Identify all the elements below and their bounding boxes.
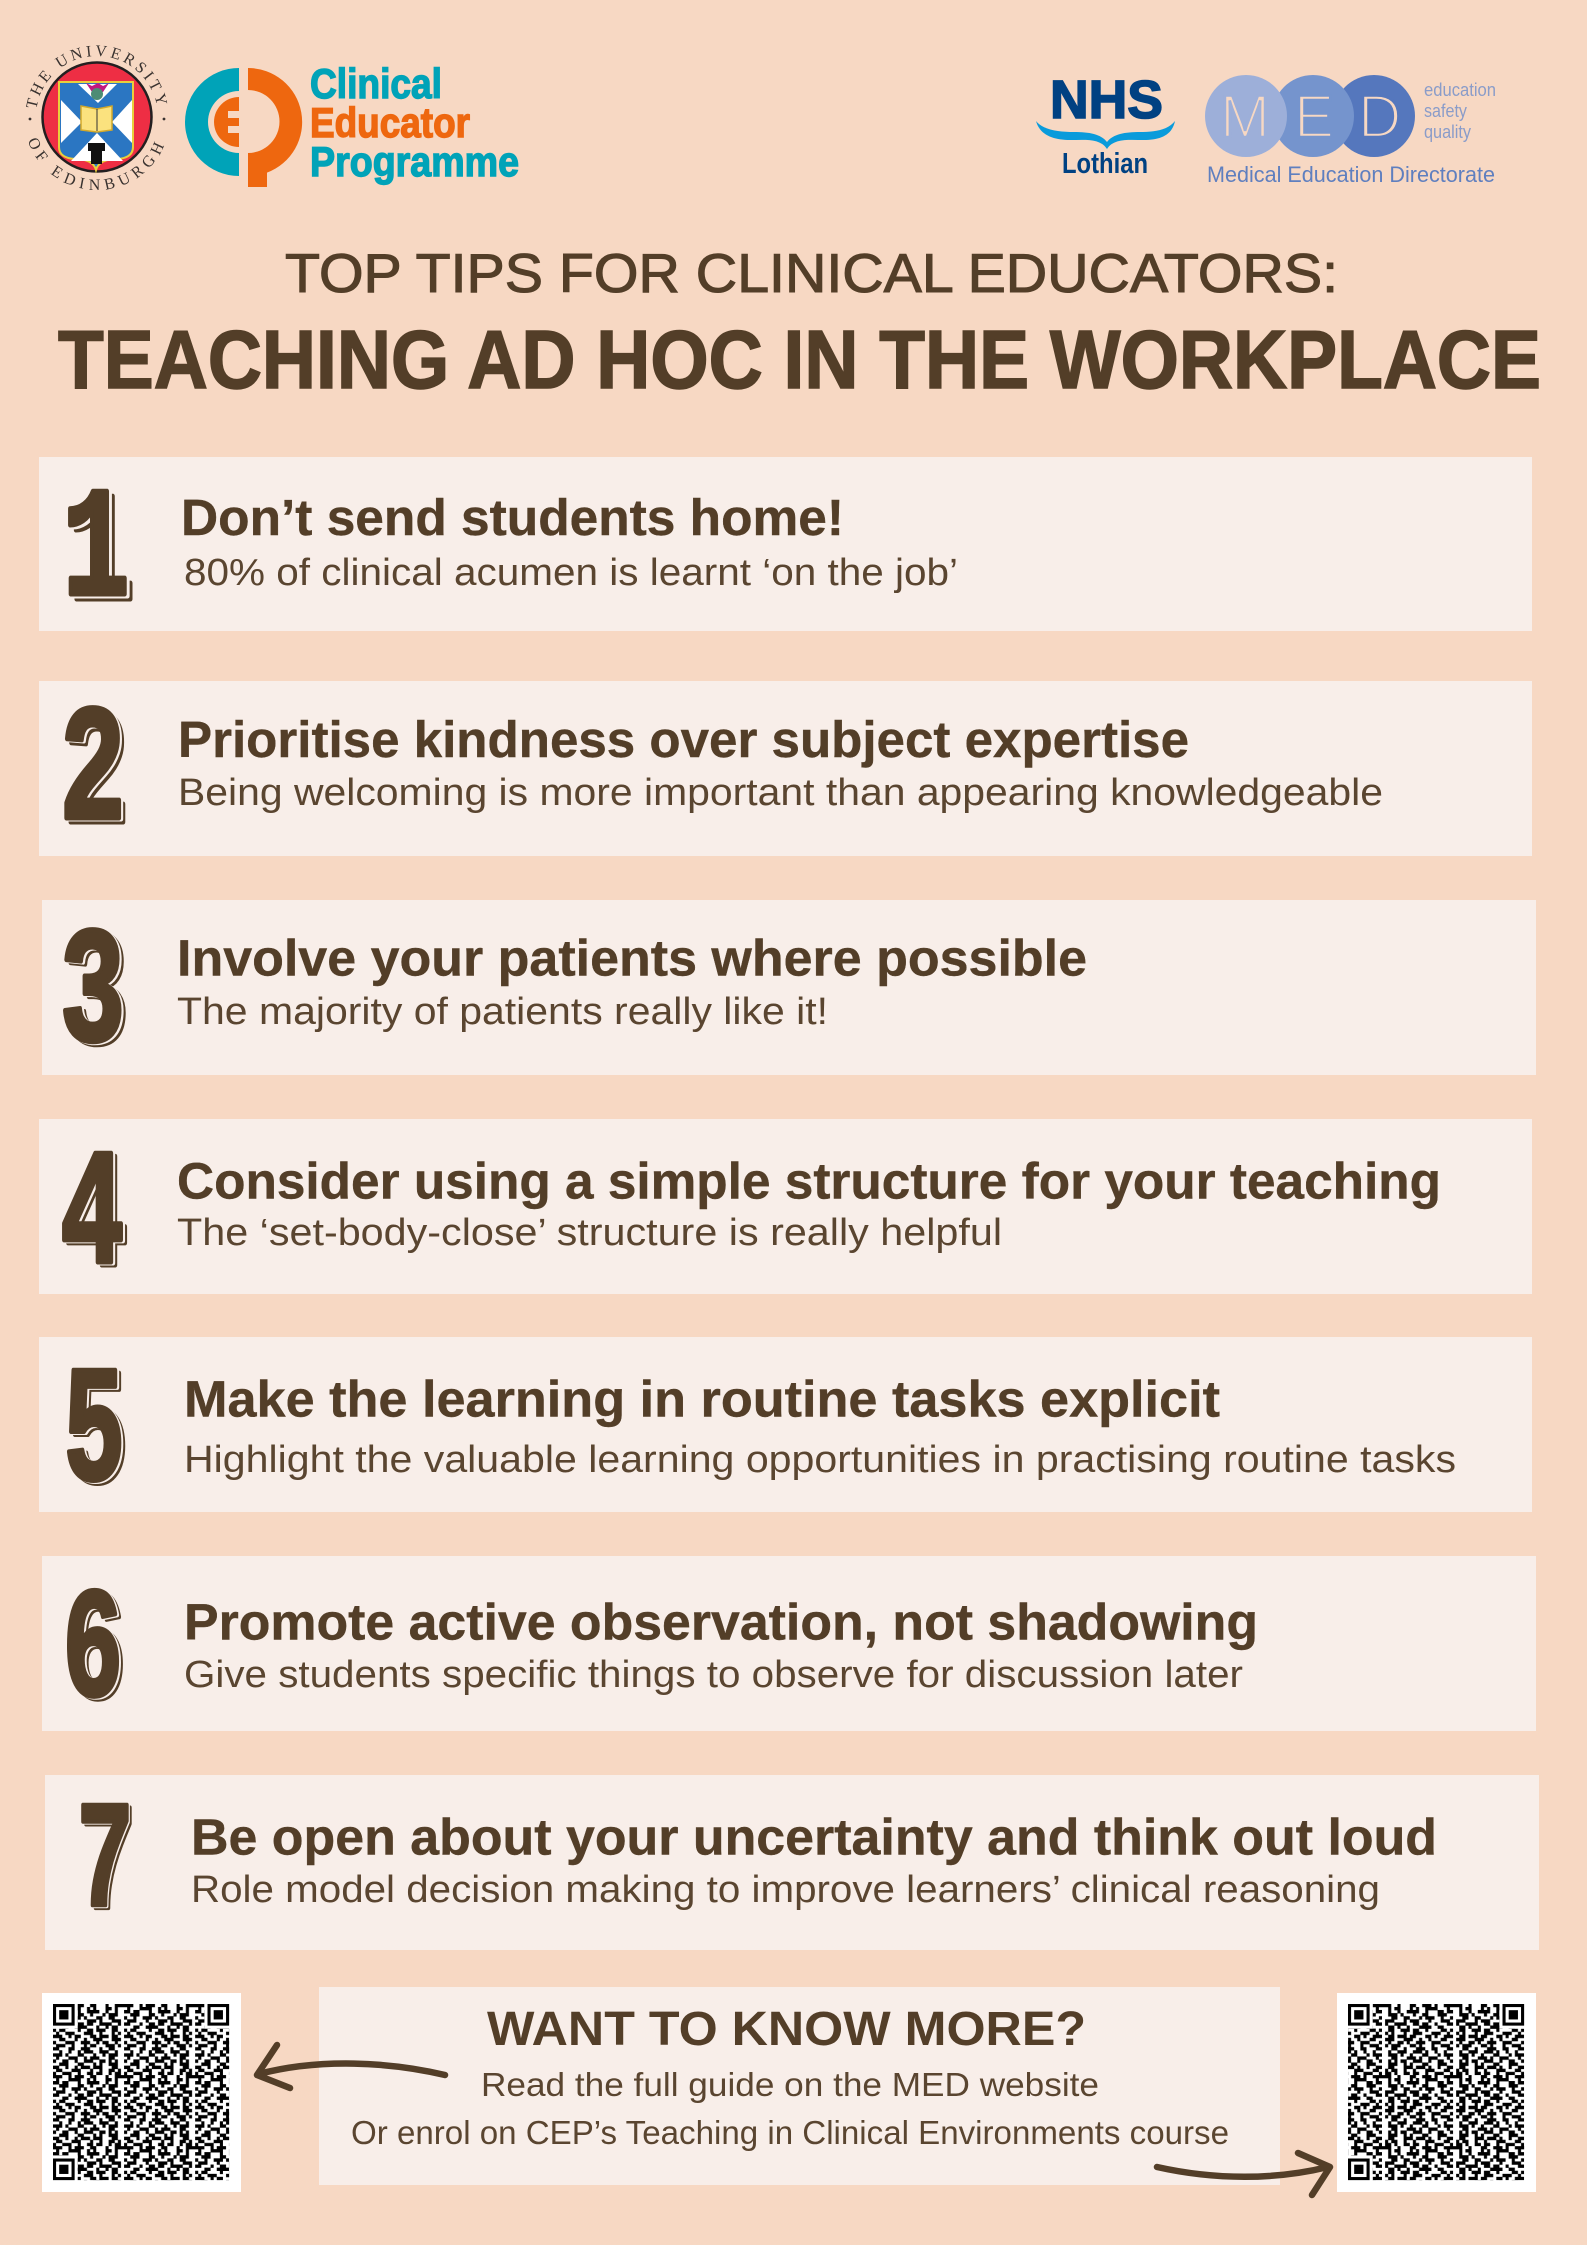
QR code: left: [42, 1993, 241, 2192]
number 4: 4: [62, 1119, 122, 1296]
panel: tip 6: [42, 1556, 1536, 1731]
logo: Clinical Educator Programme: [185, 60, 519, 187]
panel: tip 1: [39, 457, 1532, 646]
description: The ‘set-body-close’ structure is really helpful: [177, 1212, 1002, 1254]
panel: tip 5: [39, 1337, 1532, 1516]
line: full guide: Read the full guide on the MED website: [481, 2066, 1099, 2103]
description: The majority of patients really like it!: [177, 991, 828, 1033]
number 3: 3: [64, 898, 126, 1075]
heading: Prioritise kindness over subject expertise: [178, 711, 1189, 768]
logo: Medical Education Directorate: D: [1358, 83, 1401, 150]
heading: Be open about your uncertainty and think out loud: [191, 1808, 1437, 1866]
small E: [214, 97, 239, 147]
logo: University of Edinburgh crest: OF EDINBURGH: [29, 138, 164, 190]
logo: NHS Lothian: NHS: [1050, 70, 1163, 130]
panel: tip 4: [39, 1119, 1532, 1299]
title: top tips: TOP TIPS FOR CLINICAL EDUCATORS:: [285, 242, 1338, 304]
number 6: 6: [69, 1563, 125, 1731]
heading: Involve your patients where possible: [177, 930, 1087, 986]
description: Highlight the valuable learning opportunities in practising routine tasks: [184, 1439, 1456, 1481]
line: enrol: Or enrol on CEP’s Teaching in Clinical Environments course: [351, 2114, 1229, 2151]
number 3: 3: [66, 900, 128, 1077]
logo: Medical Education Directorate: safety: [1424, 101, 1467, 121]
number 5: 5: [65, 1337, 123, 1513]
number 1: 1: [68, 469, 135, 646]
logo: University of Edinburgh crest: THE UNIVERSITY: [26, 45, 168, 108]
panel: tip 3: [42, 897, 1536, 1077]
description: Being welcoming is more important than appearing knowledgeable: [178, 772, 1383, 814]
number 7: 7: [80, 1776, 133, 1938]
logo: Medical Education Directorate: E: [1294, 83, 1334, 150]
logo: NHS Lothian: Lothian: [1062, 148, 1148, 180]
heading: WANT TO KNOW MORE?: [487, 2003, 1086, 2056]
number 7: 7: [79, 1775, 131, 1937]
description: Give students specific things to observe for discussion later: [184, 1654, 1243, 1696]
heading: Make the learning in routine tasks explicit: [184, 1370, 1220, 1428]
logo: Clinical Educator Programme: Educator: [310, 99, 470, 146]
logo: University of Edinburgh crest: [26, 45, 168, 190]
panel: want to know more: [319, 1987, 1280, 2185]
logo: Clinical Educator Programme: Programme: [310, 138, 519, 185]
description: Role model decision making to improve learners’ clinical reasoning: [191, 1869, 1380, 1911]
number 4: 4: [66, 1122, 126, 1299]
logo: Medical Education Directorate: quality: [1424, 122, 1471, 142]
number 5: 5: [69, 1340, 126, 1516]
number 3: 3: [62, 897, 124, 1074]
QR code: right: [1337, 1993, 1536, 2192]
number 2: 2: [62, 675, 124, 852]
number 4: 4: [64, 1120, 124, 1297]
heading: Don’t send students home!: [181, 489, 844, 546]
P ring and stem: [248, 68, 302, 187]
number 6: 6: [65, 1560, 121, 1728]
logo: Medical Education Directorate: [1205, 75, 1496, 187]
number 5: 5: [67, 1338, 125, 1514]
heading: Promote active observation, not shadowing: [184, 1594, 1258, 1650]
logo: Medical Education Directorate: education: [1424, 80, 1496, 100]
logo: Medical Education Directorate: M: [1220, 83, 1270, 150]
panel: tip 7: [45, 1775, 1539, 1950]
panel: tip 2: [39, 675, 1532, 856]
logo: NHS Lothian: [1036, 70, 1175, 180]
wordmark: Clinical: [310, 60, 442, 107]
number 6: 6: [67, 1561, 123, 1729]
logo: Medical Education Directorate: Medical Education Directorate: [1207, 162, 1495, 187]
number 2: 2: [64, 676, 126, 853]
number 2: 2: [66, 679, 128, 856]
arrow: to right QR code: [1157, 2153, 1330, 2195]
number 1: 1: [65, 466, 133, 643]
C half ring: [185, 68, 239, 176]
description: 80% of clinical acumen is learnt ‘on the job’: [184, 552, 958, 594]
heading: Consider using a simple structure for your teaching: [177, 1152, 1441, 1210]
number 7: 7: [82, 1777, 134, 1940]
number 1: 1: [62, 464, 130, 641]
arrow: to left QR code: [257, 2045, 445, 2088]
